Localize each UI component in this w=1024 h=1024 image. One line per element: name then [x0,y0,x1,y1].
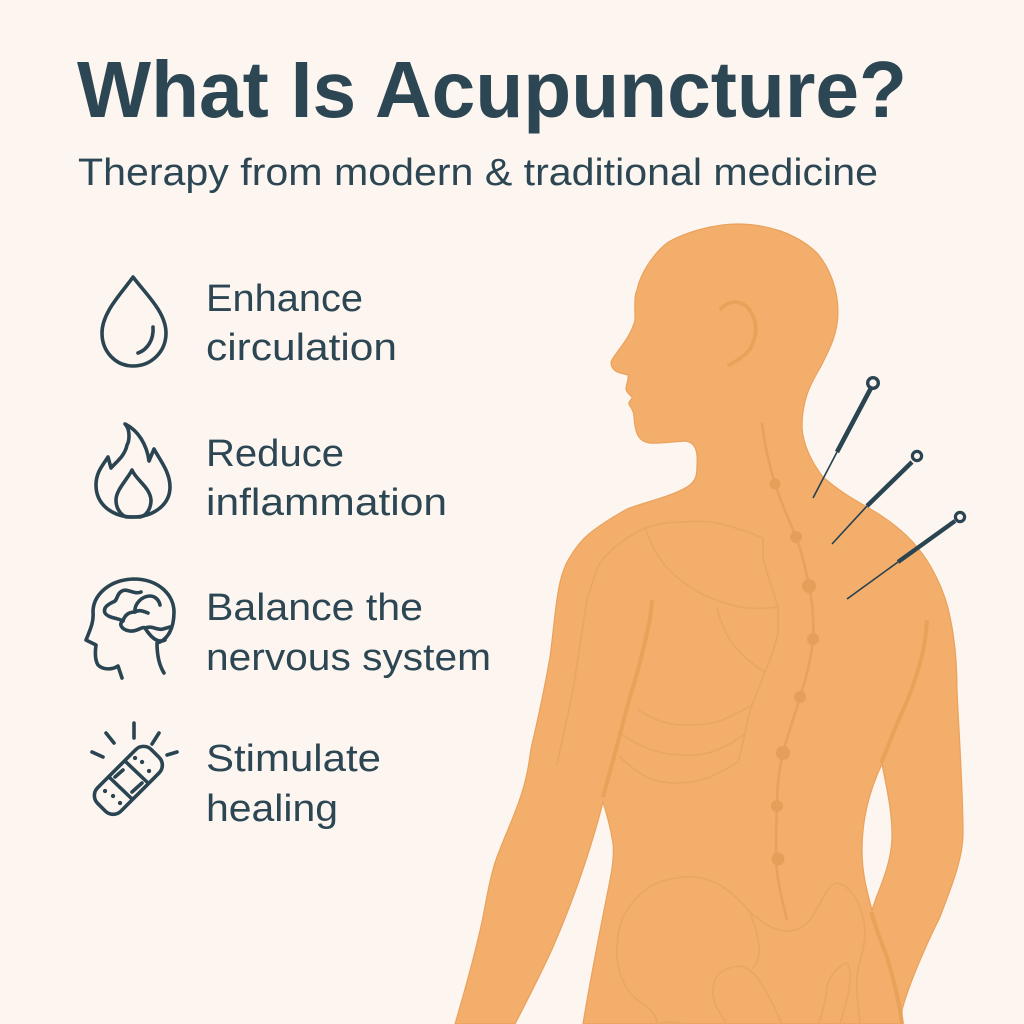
subtitle: Therapy from modern & traditional medicine [78,152,878,194]
benefit: enhance circulation: Enhance [206,278,363,320]
benefit: stimulate healing: healing [206,788,338,830]
needle 1 [813,378,878,498]
benefit: enhance circulation [206,278,397,369]
benefit: stimulate healing [206,738,381,830]
body silhouette [455,224,963,1024]
benefit: reduce inflammation: Reduce [206,433,344,475]
needle 2 [832,451,922,544]
icon: bandage [90,723,177,819]
needle 3 [847,512,965,599]
icon: water drop [102,277,166,366]
benefit: balance the nervous system: nervous system [206,637,491,679]
benefit: enhance circulation: circulation [206,327,397,369]
icon: flame [96,424,170,517]
muscle and torso creases [603,600,927,1024]
benefit: reduce inflammation: inflammation [206,482,447,524]
benefit: stimulate healing: Stimulate [206,738,381,780]
meridian line with acupoints [762,423,819,920]
benefit: balance the nervous system: Balance the [206,587,423,629]
icon: head with brain [86,579,174,678]
title: What Is Acupuncture? [77,45,907,134]
benefit: reduce inflammation [206,433,447,524]
ear [721,302,756,365]
human body illustration [455,224,965,1024]
anatomy contour lines [557,521,865,1024]
benefit: balance the nervous system [206,587,491,679]
